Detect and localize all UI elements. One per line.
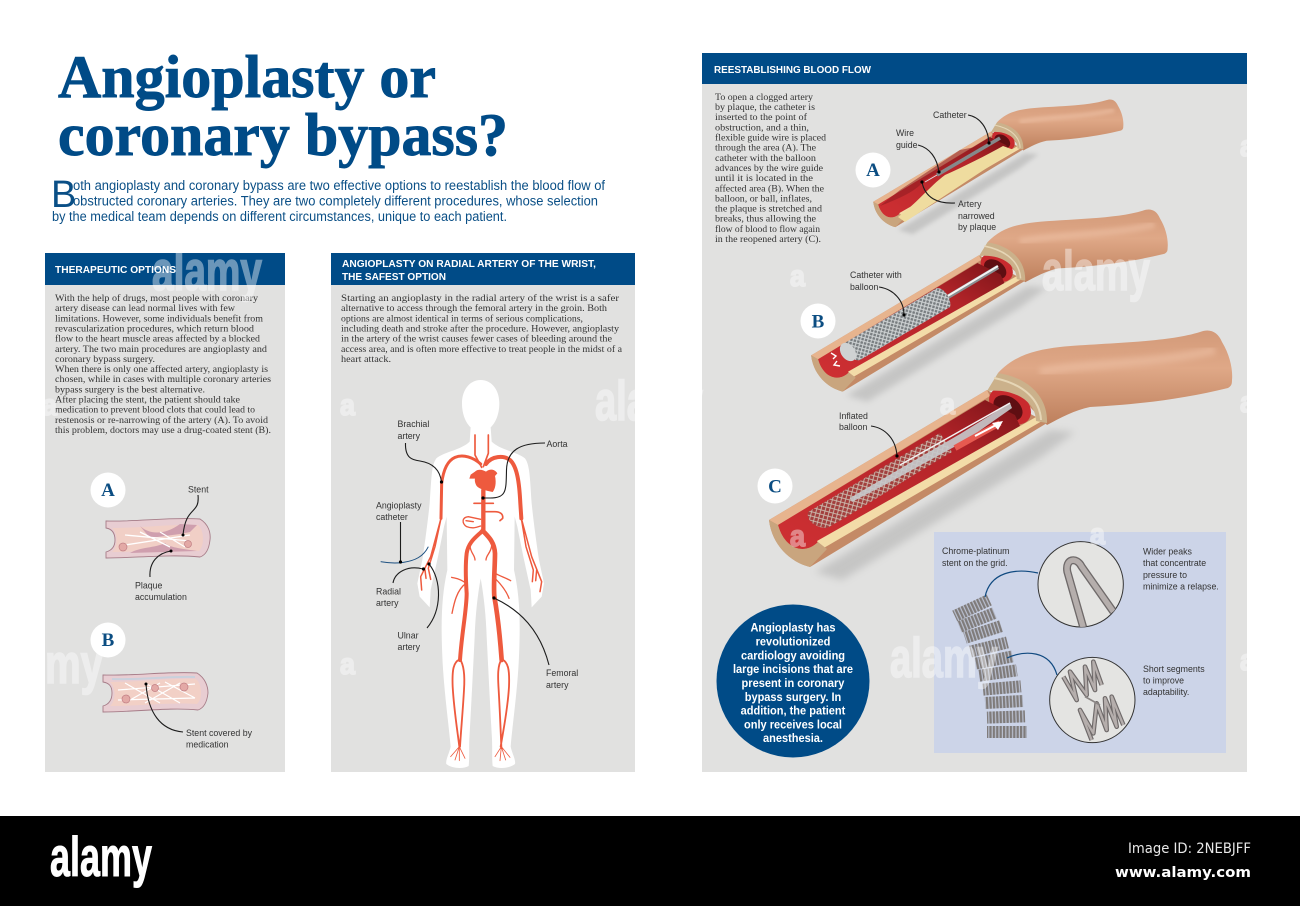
watermark overlay: a [42, 389, 57, 422]
text block: radial artery: in the artery of the wrist causes fewer cases of bleeding around the [341, 334, 612, 345]
label: catheter with balloon: balloon [850, 282, 878, 292]
intro text with drop cap: by the medical team depends on different circumstances, unique to each patient. [52, 209, 507, 224]
label: wire guide: Wire [896, 128, 914, 138]
illustration: artery B with catheter balloon [811, 209, 1168, 402]
text block: therapeutic options [55, 293, 271, 436]
label: brachial artery: artery [398, 431, 421, 441]
label: catheter [933, 110, 991, 145]
watermark overlay: a [790, 520, 805, 553]
text block: procedure: through the area (A). The [715, 143, 816, 154]
text block: therapeutic options: this problem, doctors may use a drug-coated stent (B). [55, 425, 271, 436]
text block: therapeutic options: restenosis or re-narrowing of the artery (A). To avoid [55, 415, 268, 426]
text block: procedure: balloon, or ball, inflates, [715, 193, 812, 204]
label: stent covered by medication [144, 682, 253, 750]
label: short segments [1143, 664, 1205, 697]
label: femoral artery: Femoral [546, 668, 578, 678]
label: artery narrowed by plaque: by plaque [958, 222, 996, 232]
text block: therapeutic options: bypass surgery is the best alternative. [55, 384, 205, 395]
label: artery narrowed by plaque [920, 180, 996, 232]
text block: radial artery: Starting an angioplasty in the radial artery of the wrist is a safer [341, 293, 620, 304]
watermark overlay: a [1090, 518, 1105, 551]
label: brachial artery [398, 419, 443, 484]
text block: procedure: affected area (B). When the [715, 183, 824, 194]
body silhouette [417, 380, 544, 768]
label: inflated balloon [839, 411, 899, 458]
label: wider peaks: Wider peaks [1143, 546, 1192, 556]
text block: therapeutic options: revascularization procedures, which return blood [55, 324, 254, 334]
detail: wider peaks [1038, 542, 1123, 630]
icon: badge B [90, 622, 126, 658]
text block: therapeutic options: medication to prevent blood clots that could lead to [55, 405, 255, 416]
illustration: bent stent [952, 595, 1027, 738]
title: Angioplasty or [58, 44, 436, 110]
label: wider peaks: that concentrate [1143, 558, 1206, 568]
watermark overlay: alamy [1042, 239, 1150, 302]
label: radial artery: Radial [376, 586, 401, 596]
icon: badge A: A [866, 160, 880, 181]
label: short segments: adaptability. [1143, 687, 1189, 697]
text block: procedure: obstruction, and a thin, [715, 122, 809, 133]
label: wider peaks: pressure to [1143, 570, 1187, 580]
catheter [381, 547, 428, 563]
title [58, 44, 508, 168]
text block: radial artery: options are almost identical in terms of serious complications, [341, 313, 583, 324]
label: angioplasty catheter: catheter [376, 512, 408, 522]
text block: procedure: flexible guide wire is placed [715, 133, 826, 144]
label: ulnar artery: Ulnar [398, 630, 419, 640]
label: ulnar artery: artery [398, 642, 421, 652]
label: stent [182, 484, 209, 536]
label: wire guide [896, 128, 941, 174]
heading: reestablishing blood flow: REESTABLISHING BLOOD FLOW [714, 64, 871, 76]
watermark overlay: alamy [595, 369, 703, 432]
text block: radial artery: including death and stroke after the procedure. However, angioplasty [341, 324, 619, 334]
text block: therapeutic options: flow to the heart muscle areas affected by a blocked [55, 334, 260, 345]
panel: chrome-platinum stent [934, 532, 1226, 753]
text block: therapeutic options: limitations. However, some individuals benefit from [55, 313, 264, 324]
detail: short segments [1050, 657, 1135, 743]
label: wider peaks: minimize a relapse. [1143, 582, 1219, 592]
panel: radial artery angioplasty [331, 253, 635, 772]
watermark overlay: a [940, 388, 955, 421]
heading: radial artery: ANGIOPLASTY ON RADIAL ARTERY OF THE WRIST, [342, 258, 596, 270]
footer url: www.alamy.com [1115, 865, 1251, 881]
label: wire guide: guide [896, 140, 918, 150]
arrow: stent to wider peaks detail [985, 571, 1038, 597]
label: wider peaks [1143, 546, 1219, 592]
label: aorta [481, 439, 568, 500]
label: stent: Stent [188, 484, 209, 494]
illustration: artery A narrowed by plaque [873, 99, 1123, 234]
text block: radial artery: heart attack. [341, 354, 391, 365]
label: brachial artery: Brachial [398, 419, 429, 429]
watermark overlay [42, 130, 1255, 695]
label: femoral artery [492, 596, 578, 690]
intro text with drop cap [51, 174, 605, 224]
illustration: artery C with inflated balloon [769, 330, 1232, 580]
icon: badge A: A [101, 480, 115, 501]
intro text with drop cap: obstructed coronary arteries. They are two completely different procedures, whose selection [73, 194, 598, 208]
text block: therapeutic options: artery. The two main procedures are angioplasty and [55, 344, 267, 355]
text block: procedure: by plaque, the catheter is [715, 102, 815, 113]
text block: radial artery: access area, and is often more effective to treat people in the midst of a [341, 344, 623, 355]
label: catheter: Catheter [933, 110, 967, 120]
text block: radial artery [341, 293, 623, 365]
label: radial artery: artery [376, 598, 399, 608]
text block: procedure: To open a clogged artery [715, 92, 813, 103]
heading: therapeutic options: THERAPEUTIC OPTIONS [55, 264, 176, 276]
footer image id: Image ID: 2NEBJFF [1128, 841, 1251, 857]
watermark overlay: a [790, 260, 805, 293]
intro text with drop cap: oth angioplasty and coronary bypass are two effective options to reestablish the blood flow of [73, 178, 605, 193]
heading: radial artery [331, 253, 635, 285]
footer bar [0, 816, 1300, 906]
text block: therapeutic options: coronary bypass surgery. [55, 354, 155, 365]
illustration: vessel with drug-coated stent [103, 673, 208, 712]
heading: radial artery: THE SAFEST OPTION [342, 271, 446, 283]
watermark overlay: a [340, 648, 355, 681]
text block: procedure: breaks, thus allowing the [715, 214, 816, 225]
label: femoral artery: artery [546, 680, 569, 690]
footer logo: alamy [50, 825, 152, 888]
arrow: stent to short segments detail [1007, 653, 1057, 675]
label: short segments: Short segments [1143, 664, 1205, 674]
text block: procedure: flow of blood to flow again [715, 224, 820, 235]
illustration: human body with arteries [381, 380, 544, 768]
watermark overlay: a [340, 389, 355, 422]
callout: local anesthesia: bypass surgery. In [745, 690, 841, 704]
icon: badge B: B [102, 630, 115, 651]
text block: procedure: the plaque is stretched and [715, 204, 822, 214]
text block: radial artery: alternative to access through the femoral artery in the groin. Both [341, 303, 607, 314]
icon: badge A [856, 152, 890, 188]
label: chrome-platinum stent: Chrome-platinum [942, 546, 1009, 556]
text block: therapeutic options: With the help of drugs, most people with coronary [55, 293, 258, 304]
label: artery narrowed by plaque: narrowed [958, 211, 995, 221]
text block: procedure: in the reopened artery (C). [715, 234, 821, 245]
callout: local anesthesia: anesthesia. [763, 732, 823, 745]
icon: badge A [90, 472, 126, 508]
callout: local anesthesia: Angioplasty has [750, 621, 836, 635]
label: chrome-platinum stent [942, 546, 1009, 568]
label: catheter with balloon: Catheter with [850, 270, 902, 280]
text block: procedure: catheter with the balloon [715, 153, 816, 164]
label: catheter with balloon [850, 270, 906, 317]
callout: local anesthesia: present in coronary [742, 676, 845, 690]
label: chrome-platinum stent: stent on the grid. [942, 558, 1008, 568]
panel: reestablishing blood flow [702, 53, 1247, 772]
text block: procedure [715, 92, 826, 245]
icon: badge B [800, 304, 836, 338]
callout: local anesthesia: revolutionized [756, 635, 830, 649]
label: inflated balloon: Inflated [839, 411, 868, 421]
text block: therapeutic options: artery disease can lead normal lives with few [55, 303, 235, 314]
text block: therapeutic options: chosen, while in cases with multiple coronary arteries [55, 374, 271, 385]
icon: badge B: B [812, 312, 825, 332]
label: angioplasty catheter [376, 500, 422, 564]
label: angioplasty catheter: Angioplasty [376, 500, 422, 510]
heading: therapeutic options [45, 253, 285, 285]
illustration: vessel with stent and plaque [106, 519, 210, 558]
intro text with drop cap: B [51, 174, 76, 216]
callout: local anesthesia [716, 604, 870, 758]
callout: local anesthesia: addition, the patient [741, 704, 845, 718]
text block: procedure: advances by the wire guide [715, 163, 823, 174]
text block: therapeutic options: After placing the stent, the patient should take [55, 394, 240, 406]
icon: badge C [758, 468, 792, 504]
watermark overlay: alamy [890, 626, 998, 689]
label: short segments: to improve [1143, 676, 1184, 686]
text block: therapeutic options: When there is only one affected artery, angioplasty is [55, 364, 268, 375]
callout: local anesthesia: only receives local [744, 718, 842, 732]
callout: local anesthesia: large incisions that are [733, 663, 853, 676]
label: inflated balloon: balloon [839, 422, 867, 432]
watermark overlay: a [1240, 386, 1255, 419]
label: stent covered by medication: medication [186, 740, 229, 750]
label: radial artery [376, 567, 425, 608]
artery network [421, 435, 542, 761]
label: plaque accumulation: accumulation [135, 592, 187, 602]
watermark overlay: alamy [152, 239, 262, 302]
title: coronary bypass? [58, 102, 508, 168]
label: ulnar artery [398, 562, 439, 652]
label: artery narrowed by plaque: Artery [958, 199, 982, 209]
text block: procedure: until it is located in the [715, 173, 813, 184]
icon: badge C: C [768, 476, 782, 498]
label: plaque accumulation [135, 550, 187, 602]
watermark overlay: my [45, 632, 103, 695]
callout: local anesthesia: cardiology avoiding [741, 649, 845, 662]
watermark overlay: a [1240, 130, 1255, 163]
watermark overlay: a [1240, 644, 1255, 677]
label: plaque accumulation: Plaque [135, 580, 162, 590]
panel: therapeutic options [45, 253, 285, 772]
label: aorta: Aorta [546, 439, 568, 449]
label: stent covered by medication: Stent covered by [186, 728, 253, 738]
heading: reestablishing blood flow [702, 53, 1247, 84]
text block: procedure: inserted to the point of [715, 112, 808, 123]
